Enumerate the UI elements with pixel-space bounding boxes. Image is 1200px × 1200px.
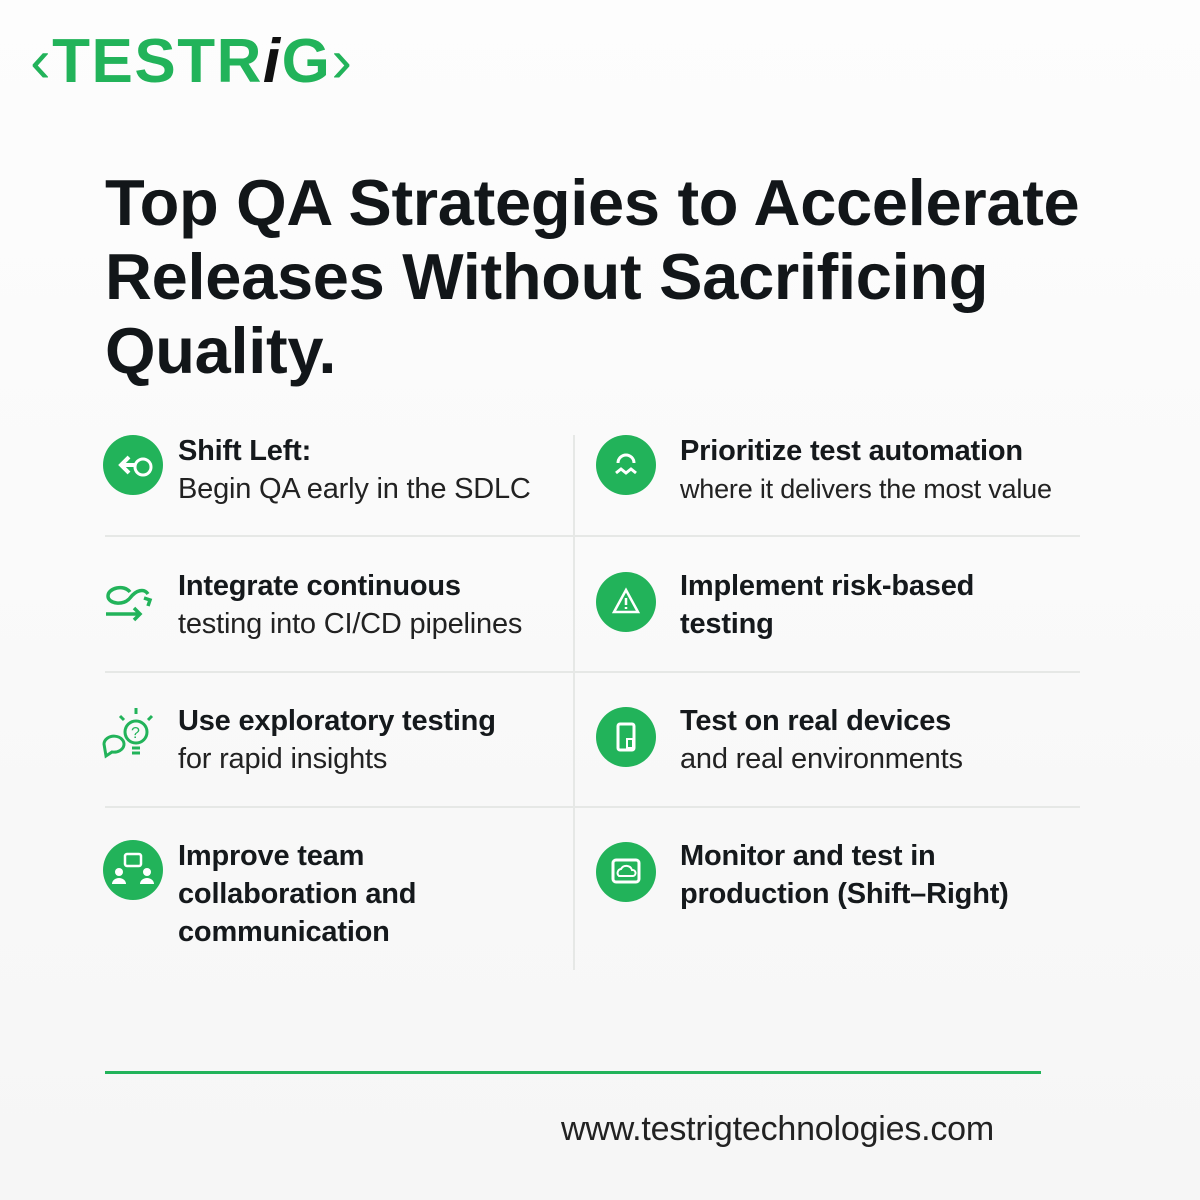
icon: shift left bbox=[103, 435, 163, 495]
title: Top QA Strategies to Accelerate bbox=[105, 166, 1079, 239]
item: automation: where it delivers the most value bbox=[680, 474, 1052, 504]
item: shift left: Shift Left: bbox=[178, 435, 311, 467]
item: shift left: Begin QA early in the SDLC bbox=[178, 473, 531, 505]
item: risk-based bbox=[596, 570, 974, 640]
item: continuous testing: testing into CI/CD pipelines bbox=[178, 608, 522, 640]
item: real devices: Test on real devices bbox=[680, 705, 951, 737]
title: Quality. bbox=[105, 314, 336, 387]
item: shift right: Monitor and test in bbox=[680, 840, 936, 872]
item: real devices: and real environments bbox=[680, 743, 963, 775]
icon: device bbox=[596, 707, 656, 767]
item: collaboration: collaboration and bbox=[178, 878, 416, 910]
icon: team bbox=[103, 840, 163, 900]
item: exploratory bbox=[102, 705, 496, 775]
icon: warning bbox=[596, 572, 656, 632]
website url: www.testrigtechnologies.com bbox=[561, 1110, 994, 1148]
icon: monitor cloud bbox=[596, 842, 656, 902]
item: shift right bbox=[596, 840, 1009, 910]
item: automation: Prioritize test automation bbox=[680, 435, 1023, 467]
dividers bbox=[105, 535, 1080, 537]
title bbox=[105, 166, 1079, 387]
item: continuous testing bbox=[106, 570, 522, 640]
icon: infinity loop bbox=[106, 586, 152, 622]
icon: lightbulb bbox=[102, 708, 153, 758]
item: exploratory: Use exploratory testing bbox=[178, 705, 496, 737]
logo: ‹TESTRiG› bbox=[30, 27, 354, 96]
item: exploratory: for rapid insights bbox=[178, 743, 387, 775]
item: collaboration: Improve team bbox=[178, 840, 364, 872]
icon: automation bbox=[596, 435, 656, 495]
item: automation bbox=[596, 435, 1052, 504]
item: shift right: production (Shift–Right) bbox=[680, 878, 1009, 910]
item: real devices bbox=[596, 705, 963, 775]
item: risk-based: testing bbox=[680, 608, 774, 640]
footer line bbox=[105, 1071, 1041, 1074]
title: Releases Without Sacrificing bbox=[105, 240, 988, 313]
item: risk-based: Implement risk-based bbox=[680, 570, 974, 602]
icon: lightbulb: ? bbox=[131, 725, 140, 742]
item: shift left bbox=[103, 435, 531, 505]
item: collaboration bbox=[103, 840, 416, 948]
item: continuous testing: Integrate continuous bbox=[178, 570, 461, 602]
item: collaboration: communication bbox=[178, 916, 390, 948]
